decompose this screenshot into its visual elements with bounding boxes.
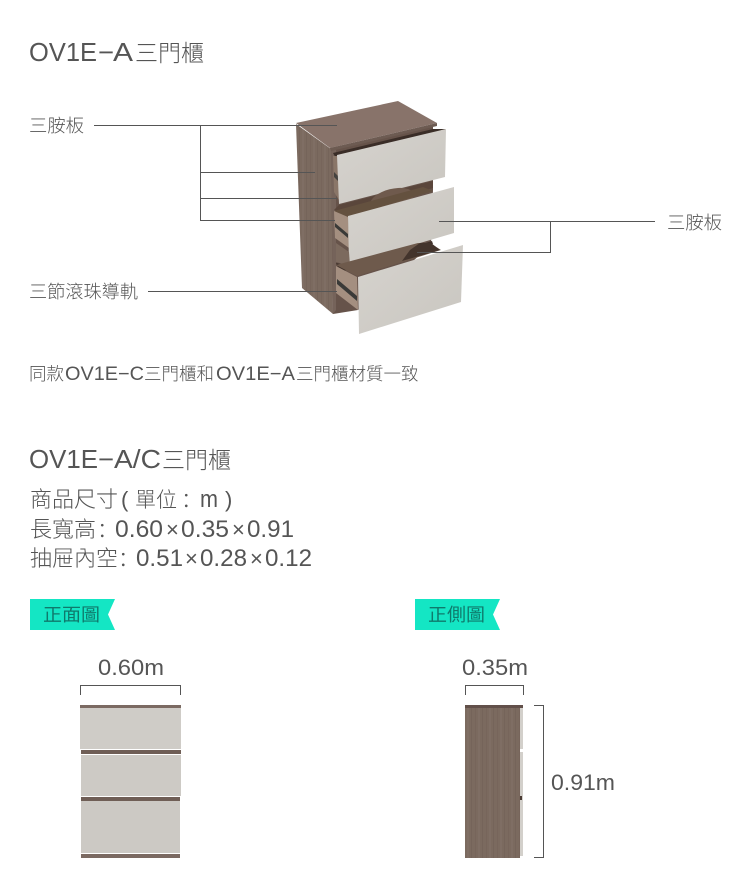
drawer 3 [336,243,463,334]
cabinet 3D illustration [296,101,463,334]
spec: outer dimensions [30,514,294,544]
leader lines [94,126,655,292]
drawer 2 [334,187,454,264]
drawer 1 [333,129,446,204]
badge: front view: 正面圖 [43,605,100,625]
note text: 同款 [29,364,64,384]
note text: 三門櫃材質一致 [296,364,418,384]
spec: drawer interior: ： [118,543,139,573]
side view cabinet [465,705,523,858]
badge: side view [415,599,500,630]
bracket: height [534,706,544,858]
dimension: 0.35m: 0.35m [462,655,528,680]
spec: drawer interior [30,543,312,573]
cabinet front carcass [330,125,433,314]
spec: drawer interior: 0.28 [200,545,247,572]
title: OV1E-A: − [98,37,114,67]
cabinet side panel [296,124,333,314]
spec: outer dimensions: × [232,517,245,542]
spec: drawer interior: × [185,546,198,571]
spec: outer dimensions: × [166,517,179,542]
carcass front column [331,150,336,314]
drawer 2 shadow band [336,243,350,266]
spec: size unit: ( [121,487,129,512]
bracket: width side [466,686,524,695]
badge: front view [30,599,115,630]
title: OV1E-A: OV1E [29,37,97,67]
spec: outer dimensions: ： [97,514,118,544]
spec: outer dimensions: 長寬高 [30,517,96,542]
spec: outer dimensions: 0.35 [181,516,229,543]
title: OV1E-A [29,37,204,67]
front view cabinet [80,705,181,858]
dimension: 0.91m: 0.91m [551,770,615,795]
note text [29,363,418,385]
drawer 1 shadow and bowl [334,181,433,214]
cabinet top [296,101,437,148]
spec: outer dimensions: 0.60 [115,516,163,543]
spec: size unit: ： [181,484,202,514]
note text: OV1E−C [65,363,144,385]
spec: drawer interior: 0.12 [265,545,312,572]
title: OV1E-A: A [113,37,134,67]
spec: outer dimensions: 0.91 [247,516,294,543]
spec: drawer interior: 抽屉內空 [30,546,118,571]
note text: OV1E−A [216,363,295,385]
heading: OV1E-A/C: 三門櫃 [162,447,231,473]
label: plywood right: 三胺板 [667,213,722,233]
heading: OV1E-A/C: A/C [114,444,161,474]
heading: OV1E-A/C: OV1E [29,444,98,474]
spec: size unit: ) [225,487,232,512]
label: plywood left: 三胺板 [29,116,84,136]
dimension: 0.60m: 0.60m [98,655,164,680]
label: ball bearing rail: 三節滾珠導軌 [29,282,138,302]
heading: OV1E-A/C: − [98,444,114,474]
bracket: width front [80,686,180,695]
spec: size unit: m [200,486,218,513]
spec: drawer interior: 0.51 [136,545,183,572]
title: OV1E-A: 三門櫃 [135,40,204,66]
note text: 三門櫃和 [144,364,214,384]
spec: size unit: 商品尺寸 [30,487,118,512]
spec: drawer interior: × [250,546,263,571]
badge: side view: 正側圖 [428,605,485,625]
spec: size unit [30,484,232,514]
spec: size unit: 單位 [135,489,177,512]
heading: OV1E-A/C [29,444,231,474]
